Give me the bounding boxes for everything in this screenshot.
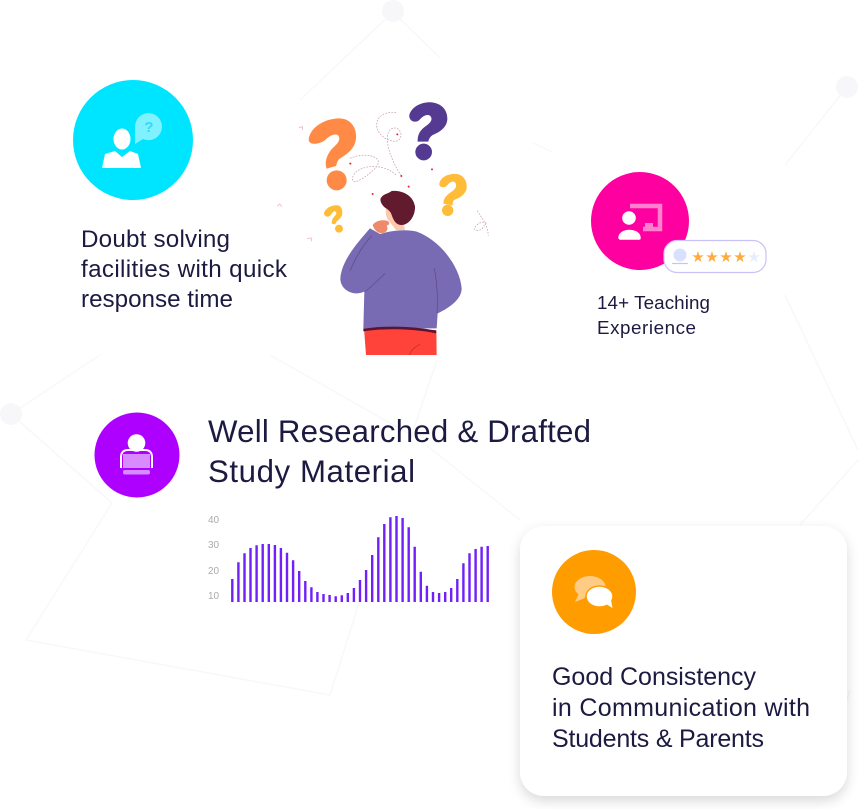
text: teaching experience: Experience [597,317,696,338]
panel: communication card [520,526,847,796]
rating badge: ★ [691,249,705,266]
orange question mark [309,118,356,190]
icon: person with question bubble [73,80,193,200]
bar chart [208,515,488,602]
bar chart: 10 [208,591,220,602]
text: teaching experience [597,292,710,338]
dashed doodles [350,112,488,236]
rating badge: ★ [733,249,747,266]
icon: person with question bubble: ? [144,119,154,136]
panel: doubt solving [73,80,288,313]
heading: study material: Study Material [208,454,415,489]
bar chart: 40 [208,515,220,526]
bar chart: 20 [208,566,220,577]
bar chart: 30 [208,540,220,551]
icon: teacher at board [591,172,689,270]
text: communication: Students & Parents [552,725,764,753]
text: communication: in Communication with [552,694,810,722]
purple question mark [409,102,447,160]
text: doubt solving: Doubt solving [81,226,230,253]
panel: study material [94,412,591,602]
heading: study material [208,414,591,489]
icon: chat bubbles [552,550,636,634]
text: doubt solving: response time [81,286,233,313]
rating badge [664,240,766,272]
illustration: thinking person with question marks [277,102,488,355]
text: teaching experience: 14+ Teaching [597,292,710,313]
rating badge: ★ [705,249,719,266]
person [340,191,462,355]
yellow question mark [439,174,467,216]
rating badge: ★ [747,249,761,266]
text: communication [552,663,810,753]
heading: study material: Well Researched & Drafted [208,414,591,449]
text: doubt solving: facilities with quick [81,256,288,283]
small yellow question mark [324,205,343,233]
icon: person at laptop [94,412,180,498]
text: communication: Good Consistency [552,663,756,691]
panel: teaching experience [591,172,766,338]
text: doubt solving [81,226,288,313]
rating badge: ★ [719,249,733,266]
